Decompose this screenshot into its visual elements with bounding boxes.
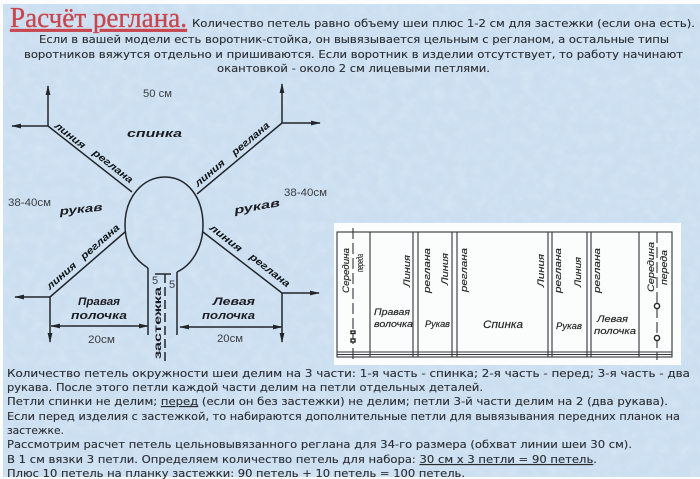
part labels: рукав — [58, 202, 104, 218]
neck opening — [125, 177, 203, 272]
closure markers — [351, 303, 660, 342]
measurements: 50 см — [143, 88, 172, 100]
explanatory text: Петли спинки не делим; перед (если он без застежки) не делим; петли 3-й части делим на 2 (два рукава). — [7, 396, 668, 408]
explanatory text: Если перед изделия с застежкой, то набираются дополнительные петли для вывязывания передних планок на — [7, 411, 680, 423]
measurements: 38-40см — [284, 187, 327, 199]
vertical labels: реглана — [459, 248, 470, 293]
part labels: Правая — [78, 296, 121, 308]
vertical labels: Линия — [402, 255, 413, 288]
measurements: 38-40см — [8, 197, 51, 209]
vertical labels: Линия — [573, 257, 584, 288]
section labels — [374, 307, 636, 337]
raglan lines and arrows — [12, 84, 320, 342]
vertical labels: переда — [355, 254, 366, 272]
panel: pattern layout — [334, 223, 681, 365]
part labels: застежка — [153, 286, 164, 359]
raglan line labels: реглана — [89, 147, 135, 186]
vertical labels — [341, 242, 670, 294]
raglan line labels: линия — [206, 222, 244, 255]
raglan line labels: линия — [51, 120, 87, 152]
measurements: 5 — [169, 279, 175, 291]
explanatory text — [7, 368, 690, 479]
raglan line labels: реглана — [78, 222, 123, 263]
section labels: Рукав — [556, 321, 582, 332]
raglan line labels — [44, 120, 292, 293]
vertical labels: Линия — [536, 254, 547, 288]
vertical labels: реглана — [592, 248, 603, 294]
intro text: окантовкой - около 2 см лицевыми петлями. — [217, 63, 490, 75]
measurements — [8, 88, 327, 346]
part labels — [58, 128, 281, 359]
explanatory text: Рассмотрим расчет петель цельновывязанного реглана для 34-го размера (обхват линии шеи 30 см). — [7, 439, 632, 451]
layout grid — [337, 228, 672, 360]
title: Расчёт реглана. — [10, 3, 187, 34]
section labels: Правая — [374, 307, 410, 318]
section labels: полочка — [594, 326, 636, 337]
vertical labels: Середина — [341, 248, 352, 293]
intro text: Количество петель равно объему шеи плюс 1-2 см для застежки (если она есть). — [192, 18, 695, 30]
placket and dimension lines — [51, 268, 282, 362]
part labels: полочка — [202, 310, 255, 322]
raglan line labels: реглана — [229, 120, 273, 159]
section labels: Спинка — [483, 319, 523, 331]
measurements: 20см — [217, 333, 243, 345]
section labels: волочка — [374, 319, 413, 330]
vertical labels: переда — [659, 250, 670, 285]
explanatory text: Количество петель окружности шеи делим на 3 части: 1-я часть - спинка; 2-я часть - перед; 3-я часть - два — [7, 368, 690, 380]
section labels: Левая — [596, 314, 628, 325]
part labels: полочка — [71, 310, 127, 322]
intro text: воротников вяжутся отдельно и пришиваются. Если воротник в изделии отсутствует, то работу начинают — [24, 49, 683, 61]
explanatory text: В 1 см вязки 3 петли. Определяем количество петель для набора: 30 см х 3 петли = 90 петель . — [7, 454, 597, 466]
part labels: рукав — [232, 197, 281, 217]
section labels: Рукав — [425, 319, 450, 330]
vertical labels: Середина — [646, 242, 657, 292]
explanatory text: застежке. — [7, 425, 64, 437]
measurements: 5 — [152, 275, 158, 287]
vertical labels: реглана — [422, 248, 433, 294]
raglan line labels: линия — [192, 158, 228, 190]
part labels: спинка — [127, 128, 182, 140]
explanatory text: рукава. После этого петли каждой части делим на петли отдельных деталей. — [7, 382, 483, 394]
measurements: 20см — [88, 334, 115, 346]
raglan diagram — [8, 84, 327, 362]
raglan line labels: реглана — [246, 251, 292, 290]
part labels: Левая — [212, 296, 256, 308]
intro text: Если в вашей модели есть воротник-стойка, он вывязывается цельным с регланом, а остальные типы — [39, 34, 669, 46]
vertical labels: Линия — [440, 253, 451, 286]
raglan line labels: линия — [44, 260, 79, 293]
vertical labels: реглана — [553, 248, 564, 294]
intro text — [24, 18, 695, 75]
